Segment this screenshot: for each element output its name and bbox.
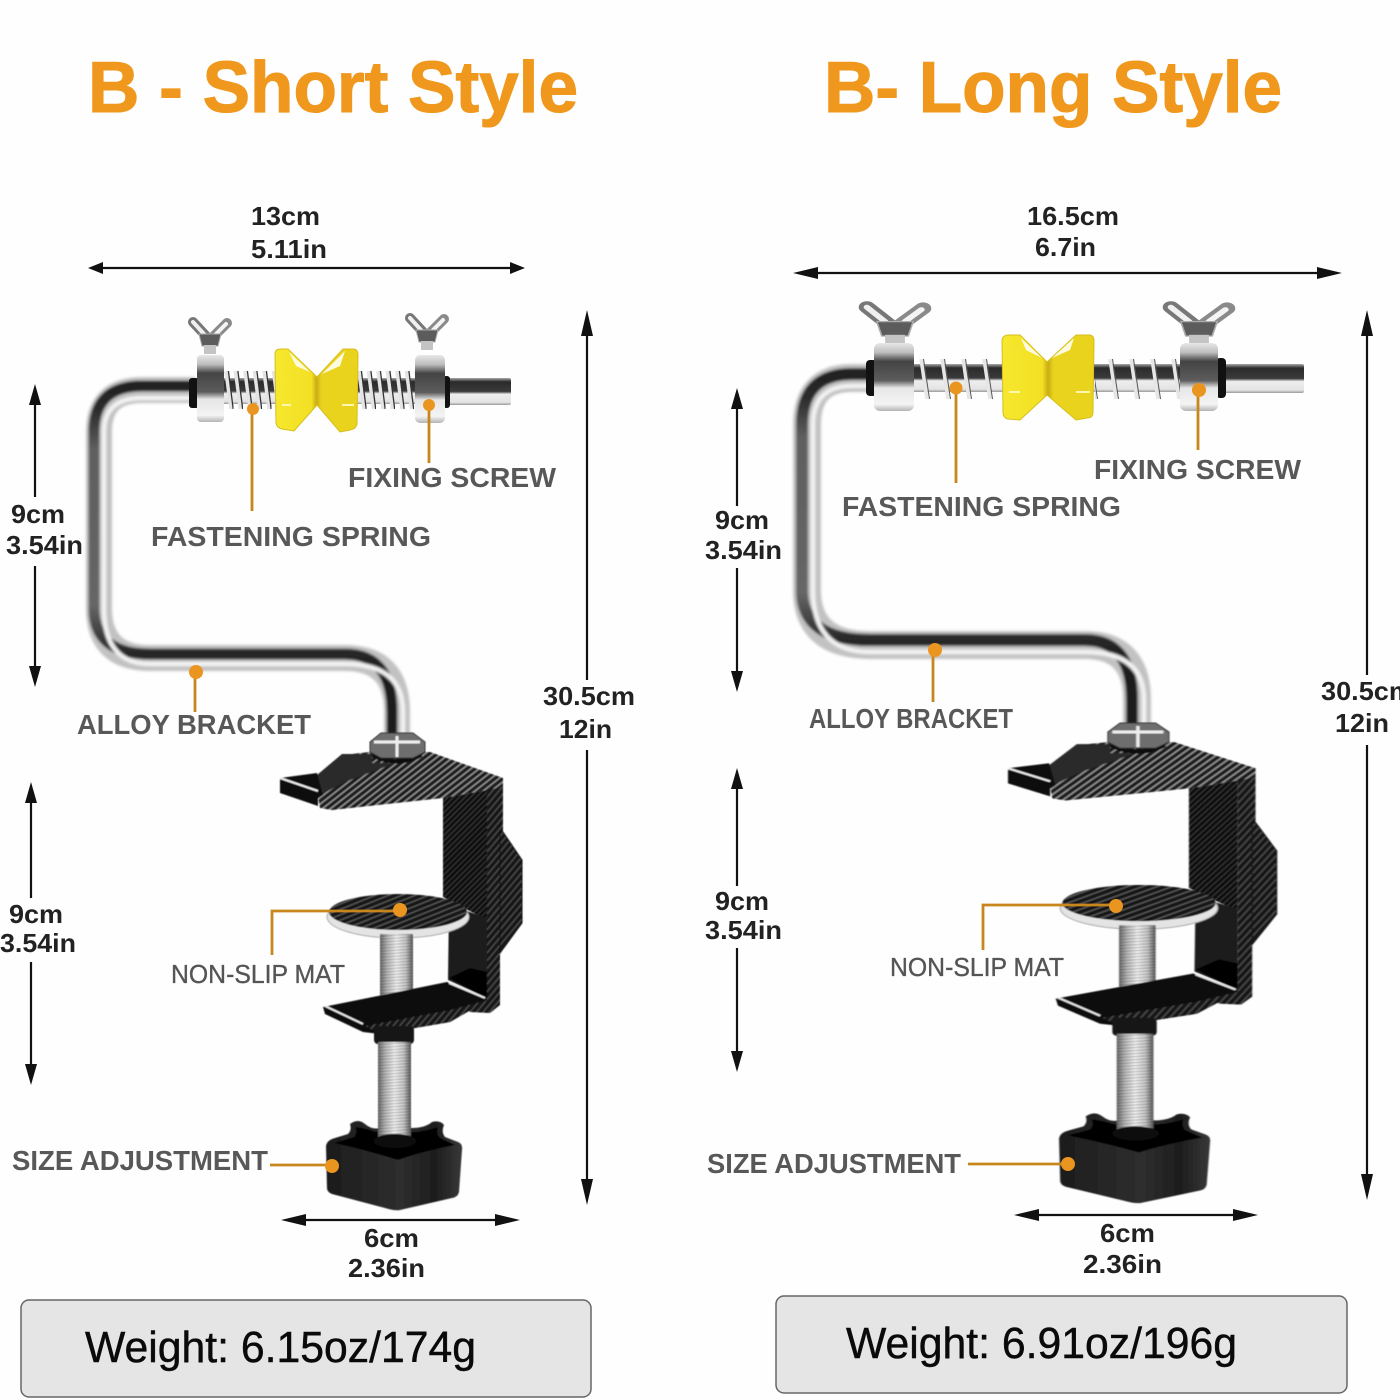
dimension: total height bbox=[543, 310, 635, 1205]
callout: alloy bracket bbox=[77, 665, 311, 740]
dimension: upper 9cm: 9cm bbox=[11, 499, 65, 529]
callout: fastening spring bbox=[842, 382, 1121, 522]
callout: fastening spring: FASTENING SPRING bbox=[151, 521, 431, 552]
callout: alloy bracket: ALLOY BRACKET bbox=[77, 709, 311, 740]
alloy tube bbox=[94, 386, 403, 742]
product: short clamp bbox=[280, 733, 522, 1210]
shaft end bbox=[446, 378, 511, 405]
callout: alloy bracket bbox=[809, 643, 1013, 734]
width dimension: 16.5cm: 6.7in bbox=[1035, 232, 1096, 262]
dimension: base width bbox=[1014, 1209, 1258, 1279]
dimension: base width bbox=[281, 1214, 520, 1283]
wing nut right bbox=[410, 318, 444, 350]
width dimension: 16.5cm: 16.5cm bbox=[1027, 201, 1119, 231]
callout: fastening spring: FASTENING SPRING bbox=[842, 491, 1121, 522]
callout: size adjustment: SIZE ADJUSTMENT bbox=[707, 1148, 961, 1179]
collar right bbox=[1180, 343, 1226, 411]
dimension: total height: 12in bbox=[1335, 708, 1389, 738]
callout: non-slip mat: NON-SLIP MAT bbox=[890, 952, 1064, 982]
dimension: upper 9cm: 9cm bbox=[715, 505, 769, 535]
width dimension: 13cm: 5.11in bbox=[251, 234, 327, 264]
dimension: upper 9cm bbox=[705, 388, 782, 692]
collar left bbox=[866, 343, 914, 411]
dimension: lower 9cm: 9cm bbox=[715, 886, 769, 916]
callout: size adjustment: SIZE ADJUSTMENT bbox=[12, 1145, 268, 1176]
dimension: base width: 2.36in bbox=[348, 1253, 425, 1283]
threaded shaft and spring bbox=[222, 370, 417, 410]
weight box: short bbox=[21, 1300, 591, 1397]
dimension: lower 9cm: 3.54in bbox=[0, 928, 76, 958]
dimension: base width: 2.36in bbox=[1083, 1249, 1162, 1279]
callout: fastening spring bbox=[151, 403, 431, 552]
panel: short style bbox=[0, 48, 635, 1397]
width dimension: 13cm: 13cm bbox=[251, 201, 320, 231]
shaft end bbox=[1216, 364, 1304, 393]
weight box: short: Weight: 6.15oz/174g bbox=[85, 1323, 476, 1372]
product: long clamp bbox=[1008, 723, 1277, 1203]
dimension: lower 9cm: 3.54in bbox=[705, 915, 782, 945]
collar left bbox=[189, 355, 224, 422]
title: long style: B- Long Style bbox=[824, 48, 1282, 128]
dimension: upper 9cm: 3.54in bbox=[705, 535, 782, 565]
yellow spool bbox=[275, 349, 358, 432]
callout: non-slip mat bbox=[171, 903, 407, 989]
weight box: long bbox=[776, 1296, 1347, 1393]
dimension: base width: 6cm bbox=[364, 1223, 419, 1253]
callout: fixing screw bbox=[348, 399, 557, 493]
dimension: lower 9cm bbox=[0, 782, 76, 1085]
dimension: upper 9cm: 3.54in bbox=[6, 530, 83, 560]
callout: fixing screw: FIXING SCREW bbox=[348, 462, 557, 493]
callout: non-slip mat: NON-SLIP MAT bbox=[171, 959, 345, 989]
width dimension: 16.5cm bbox=[793, 201, 1342, 279]
callout: alloy bracket: ALLOY BRACKET bbox=[809, 703, 1013, 734]
dimension: base width: 6cm bbox=[1100, 1218, 1155, 1248]
title: short style: B - Short Style bbox=[88, 48, 578, 128]
yellow spool bbox=[1002, 335, 1094, 420]
wing nut left bbox=[867, 307, 923, 346]
wing nut right bbox=[1171, 307, 1227, 346]
callout: non-slip mat bbox=[890, 899, 1123, 982]
callout: fixing screw: FIXING SCREW bbox=[1094, 454, 1302, 485]
dimension: lower 9cm: 9cm bbox=[9, 899, 63, 929]
panel: long style bbox=[705, 48, 1400, 1393]
dimension: upper 9cm bbox=[6, 384, 83, 687]
weight box: long: Weight: 6.91oz/196g bbox=[846, 1319, 1237, 1368]
width dimension: 13cm bbox=[88, 201, 525, 274]
product: long bracket with spool bbox=[802, 307, 1304, 728]
alloy tube bbox=[802, 374, 1144, 728]
callout: fixing screw bbox=[1094, 383, 1302, 485]
dimension: total height bbox=[1321, 310, 1400, 1200]
dimension: total height: 12in bbox=[559, 714, 612, 744]
threaded shaft and spring bbox=[910, 358, 1182, 400]
dimension: lower 9cm bbox=[705, 768, 782, 1072]
collar right bbox=[415, 355, 450, 423]
dimension: total height: 30.5cm bbox=[543, 681, 635, 711]
product: short bracket with spool bbox=[94, 318, 511, 742]
wing nut left bbox=[193, 322, 227, 354]
